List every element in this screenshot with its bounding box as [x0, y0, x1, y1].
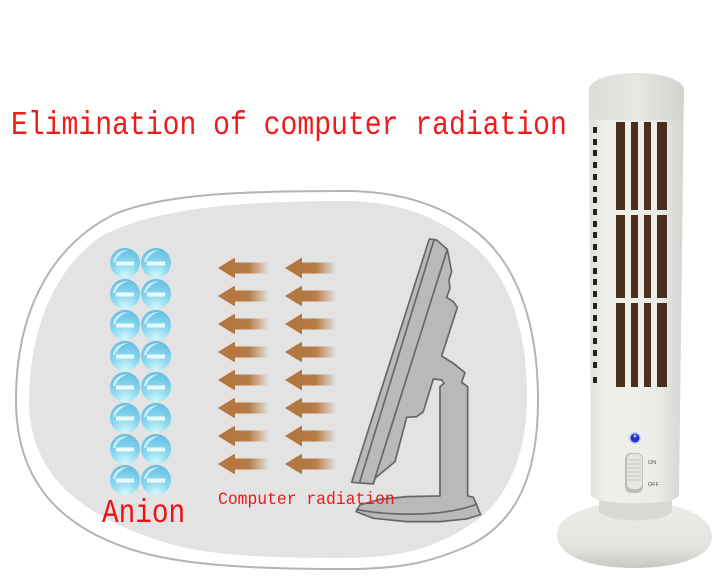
fan switch [625, 453, 643, 493]
label: computer radiation: Computer radiation [218, 490, 395, 510]
label: anion: Anion [102, 496, 185, 533]
panel: radiation diagram [16, 191, 538, 569]
title: Elimination of computer radiation [11, 107, 567, 145]
fan grille slots [616, 122, 667, 387]
fan body [589, 73, 684, 503]
switch label: on: ON [648, 460, 656, 466]
fan cap [589, 73, 684, 120]
fan neck [599, 495, 672, 520]
radiation arrows [218, 258, 336, 474]
icon: computer monitor side view [352, 239, 481, 522]
fan blue LED [629, 432, 641, 444]
anion spheres [110, 248, 171, 495]
fan base [557, 502, 712, 568]
icon: white tower fan [557, 73, 712, 568]
fan side vent holes [593, 127, 597, 383]
switch label: off: OFF [648, 482, 660, 488]
